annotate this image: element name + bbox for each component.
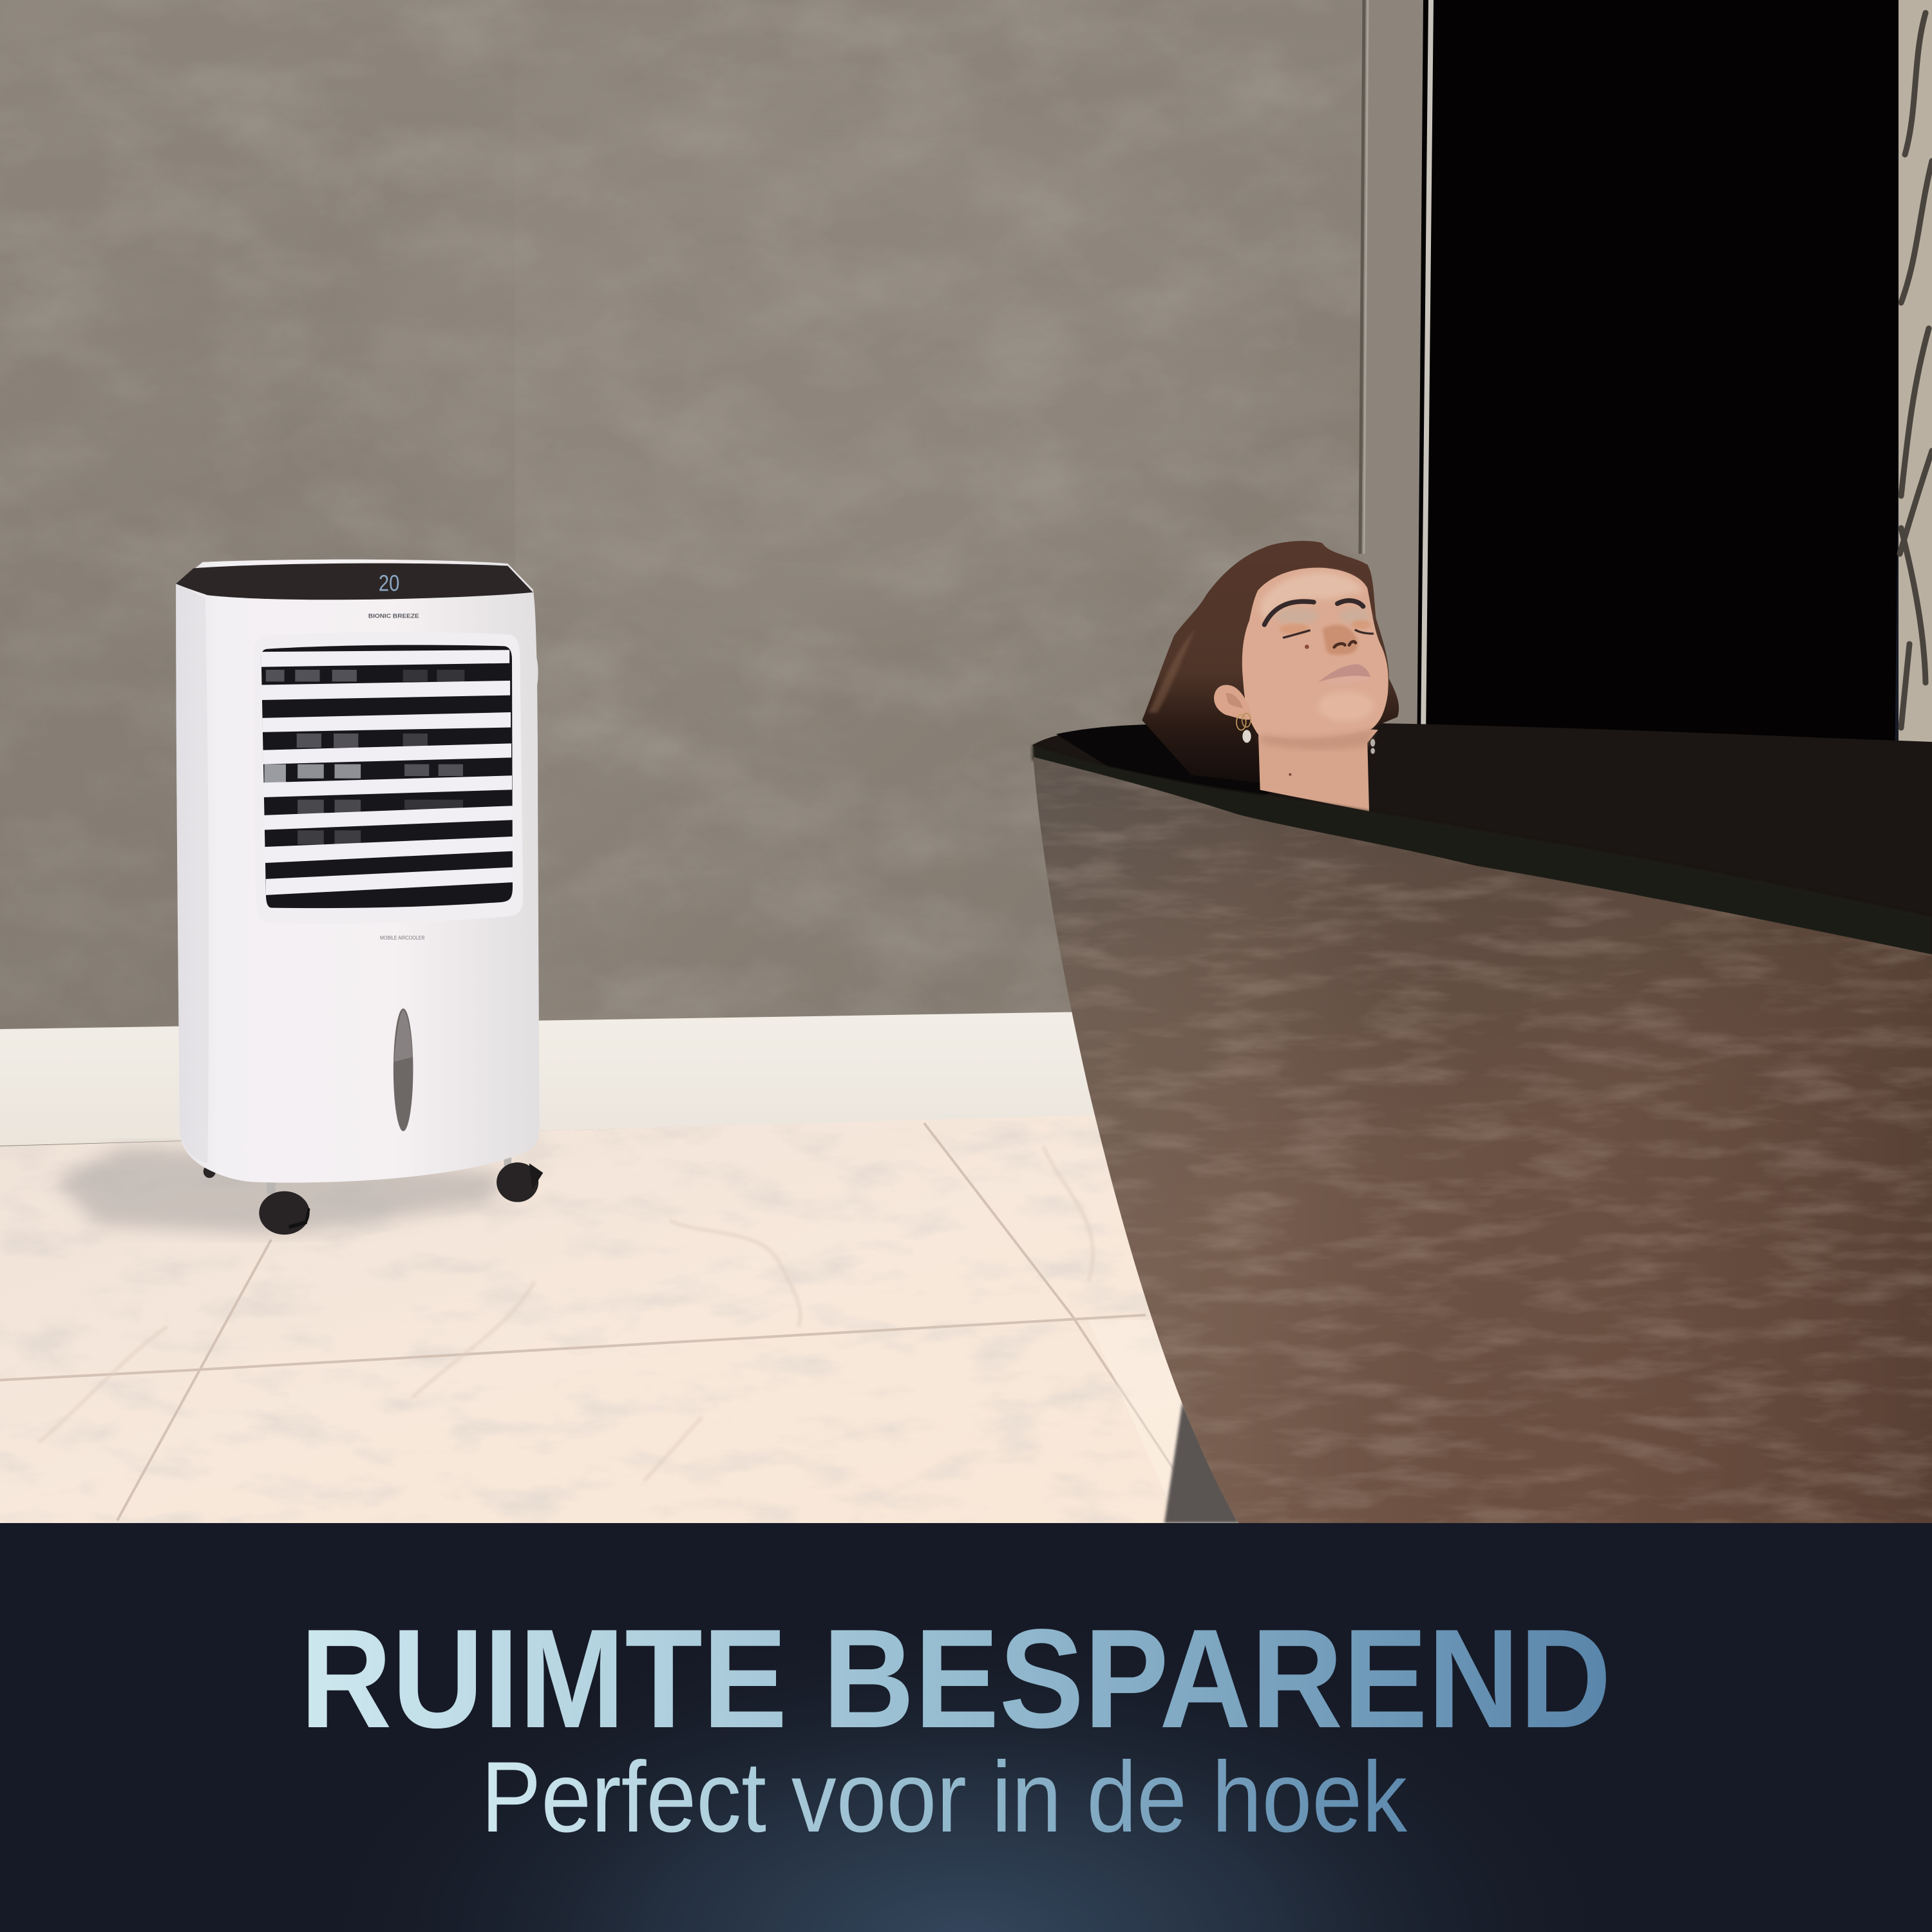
tub floor shadow xyxy=(1164,1402,1240,1523)
mole xyxy=(1305,645,1309,649)
brand label: BIONIC BREEZE xyxy=(368,612,420,620)
upper lip xyxy=(1318,665,1370,682)
rear caster xyxy=(204,1165,216,1178)
water level window xyxy=(393,1009,413,1132)
neck xyxy=(1258,721,1378,811)
inner ear xyxy=(1226,693,1243,708)
tub interior xyxy=(1032,723,1932,966)
ear xyxy=(1214,685,1251,720)
dark glass niche with white frame xyxy=(1417,0,1904,773)
patterned wallpaper xyxy=(1899,0,1932,773)
skirting board xyxy=(0,1012,1124,1146)
woman in bath xyxy=(1142,541,1399,811)
panel: caption band xyxy=(0,1523,1932,1932)
tub rim band xyxy=(1032,745,1932,960)
interior deep shadow xyxy=(1056,724,1288,799)
grille recess xyxy=(254,632,523,923)
side shade panel xyxy=(176,584,209,1163)
plaster wall xyxy=(0,0,1436,1159)
title: RUIMTE BESPAREND xyxy=(300,1600,1611,1757)
air cooler xyxy=(176,560,543,1235)
subtitle: Perfect voor in de hoek xyxy=(481,1741,1408,1853)
grille interior glimpses xyxy=(264,670,464,844)
tub wave texture xyxy=(1030,741,1932,1523)
grille opening xyxy=(261,645,513,908)
right caster xyxy=(497,1154,543,1202)
marble floor xyxy=(0,1111,1352,1523)
tub side shading xyxy=(1032,745,1932,1523)
lighter hair strands xyxy=(1148,629,1196,713)
lower lip xyxy=(1322,676,1370,683)
nose xyxy=(1322,625,1358,655)
eyebrows xyxy=(1264,601,1363,625)
tub outer wall xyxy=(1032,745,1932,1523)
right earring xyxy=(1370,739,1375,754)
closed eyes xyxy=(1283,630,1373,638)
side knob xyxy=(535,656,538,691)
eyelids xyxy=(1280,620,1370,634)
black control top xyxy=(176,564,533,600)
left earrings xyxy=(1236,714,1251,743)
photo: bathroom scene xyxy=(0,0,1932,1523)
window highlight xyxy=(394,1010,413,1062)
bottom glow xyxy=(0,1523,1932,1932)
bath tub xyxy=(1030,741,1932,1523)
chin highlight xyxy=(1318,691,1374,721)
forehead highlight xyxy=(1260,572,1364,620)
cooler floor shadow xyxy=(55,1147,505,1234)
front caster xyxy=(259,1180,310,1235)
louvers xyxy=(261,650,513,895)
jaw and neck shadow xyxy=(1260,729,1374,750)
hair xyxy=(1142,541,1399,784)
nostrils xyxy=(1334,641,1356,647)
eye sockets xyxy=(1275,607,1370,625)
housing xyxy=(176,560,540,1182)
face xyxy=(1242,567,1388,739)
model label: MOBILE AIRCOOLER xyxy=(380,936,424,941)
temperature display: 20 xyxy=(379,571,399,596)
neck mole xyxy=(1289,773,1291,776)
